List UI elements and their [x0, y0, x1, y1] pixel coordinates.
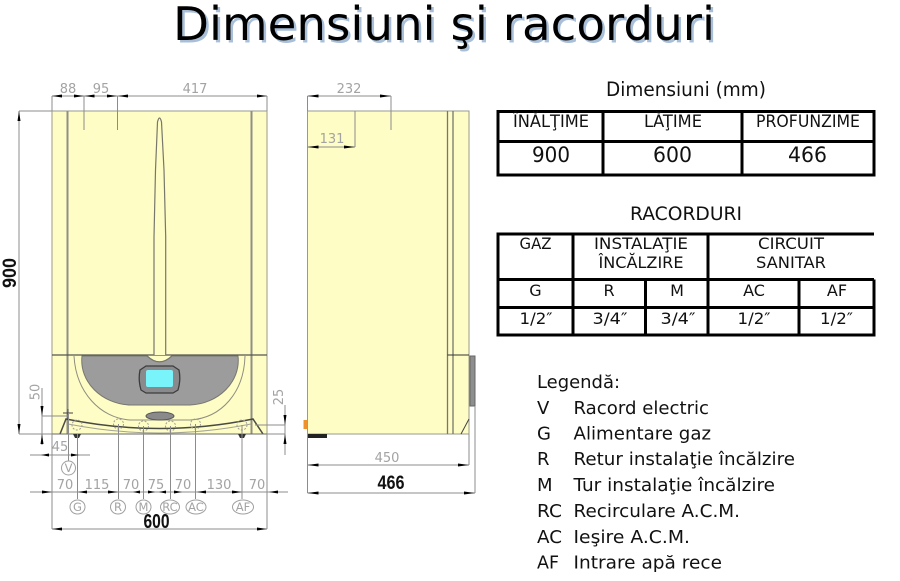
table: connections: 3/4″ — [592, 309, 628, 328]
table: dimensions: ÎNĂLŢIME — [512, 112, 589, 131]
table: connections: 1/2″ — [820, 309, 853, 328]
table: dimensions: PROFUNZIME — [756, 112, 860, 131]
side dimension values: 131 — [320, 132, 344, 147]
table: connections: G — [529, 281, 542, 300]
legend: AF — [537, 552, 559, 574]
side view technical drawing — [304, 82, 475, 494]
front dimension values: 25 — [272, 389, 287, 405]
table: connections: INSTALAŢIE — [594, 234, 688, 253]
legend: Retur instalaţie încălzire — [574, 449, 795, 470]
title: Dimensiuni şi racorduri — [176, 0, 718, 54]
legend: Legendă: — [537, 372, 620, 393]
legend: Recirculare A.C.M. — [574, 501, 740, 522]
boiler front body — [52, 111, 267, 434]
side dimension lines — [308, 94, 475, 494]
legend: M — [537, 475, 553, 496]
legend: V — [537, 398, 550, 419]
legend: Racord electric — [574, 398, 709, 419]
front dimension values: 70 — [57, 478, 73, 493]
control panel — [82, 356, 238, 420]
table: connections: AF — [827, 281, 847, 300]
connection markers: R — [114, 500, 122, 514]
side dimension values: 450 — [375, 451, 399, 466]
front dimension values: 70 — [175, 478, 191, 493]
connection markers: AC — [188, 500, 204, 514]
table: dimensions — [498, 112, 874, 175]
heading: connections: RACORDURI — [630, 204, 742, 225]
front dimension values: 130 — [207, 478, 231, 493]
boiler side body — [304, 111, 475, 438]
side dimension values: 232 — [337, 82, 361, 97]
legend: Tur instalaţie încălzire — [572, 475, 775, 496]
legend: Ieşire A.C.M. — [574, 527, 690, 548]
table: connections: 3/4″ — [660, 309, 696, 328]
heading: dimensions: Dimensiuni (mm) — [606, 78, 766, 101]
connection markers — [62, 461, 254, 514]
table: connections: 1/2″ — [520, 309, 553, 328]
table: dimensions: 900 — [532, 143, 570, 167]
table: connections: SANITAR — [756, 253, 826, 272]
table: connections — [498, 234, 874, 335]
front dimension lines — [18, 94, 288, 530]
connection markers: G — [73, 500, 82, 514]
legend — [537, 372, 795, 574]
front dimension values: 70 — [123, 478, 139, 493]
table: connections: AC — [743, 281, 765, 300]
legend: Alimentare gaz — [574, 424, 711, 444]
side dimension values — [320, 82, 404, 494]
table: connections: GAZ — [520, 234, 552, 253]
front dimension values: 45 — [52, 440, 68, 455]
legend: AC — [537, 527, 562, 548]
table: dimensions: 600 — [653, 143, 692, 167]
front dimension values: 900 — [0, 258, 21, 288]
base contour and connectors — [52, 409, 267, 438]
front dimension values: 75 — [148, 478, 164, 493]
table: connections: ÎNCĂLZIRE — [597, 253, 684, 272]
table: connections: CIRCUIT — [758, 234, 824, 253]
table: dimensions: LĂŢIME — [644, 112, 702, 131]
legend: G — [537, 424, 551, 444]
front dimension values: 70 — [249, 478, 265, 493]
front dimension values: 115 — [85, 478, 109, 493]
table: connections: M — [670, 281, 684, 300]
legend: RC — [537, 501, 562, 522]
table: connections: R — [603, 281, 615, 300]
connection markers: AF — [236, 500, 250, 514]
front dimension values: 95 — [93, 82, 109, 97]
front dimension values: 88 — [60, 82, 76, 97]
front dimension values: 50 — [28, 384, 44, 400]
connection markers: RC — [162, 500, 178, 514]
front dimension values — [0, 82, 287, 533]
table: connections: 1/2″ — [738, 309, 771, 328]
connection markers: M — [139, 500, 148, 514]
table: dimensions: 466 — [788, 143, 827, 167]
side dimension values: 466 — [378, 473, 404, 494]
legend: R — [537, 449, 550, 470]
front view technical drawing — [0, 82, 288, 533]
legend: Intrare apă rece — [574, 552, 722, 574]
front dimension values: 600 — [144, 511, 170, 533]
connection markers: V — [65, 461, 73, 475]
front dimension values: 417 — [183, 82, 207, 97]
